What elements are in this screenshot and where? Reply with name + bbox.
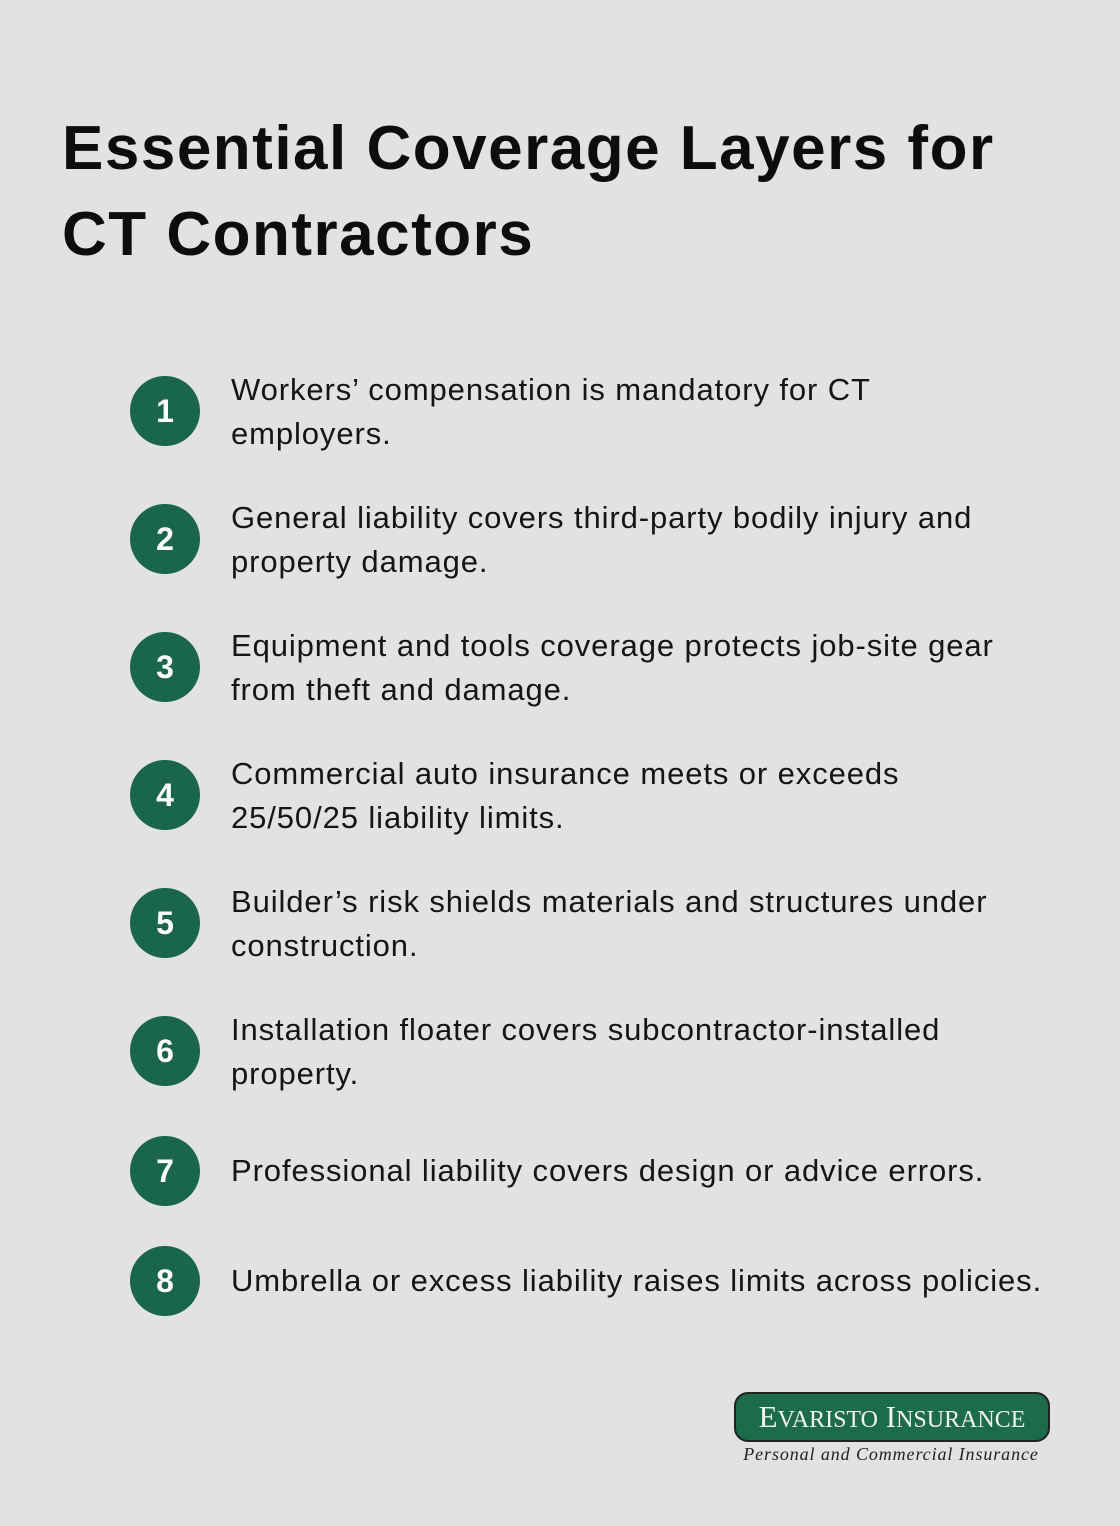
item 4: 25/50/25 liability limits.: [231, 800, 565, 835]
item 6: 6: [156, 1033, 174, 1069]
item 1: Workers’ compensation is mandatory for CT: [231, 372, 871, 407]
item 4: Commercial auto insurance meets or exceeds: [231, 756, 899, 791]
item 7: Professional liability covers design or advice errors.: [231, 1153, 984, 1188]
item 8: [130, 1246, 1042, 1316]
logo tagline: Personal and Commercial Insurance: [743, 1444, 1039, 1464]
logo badge: [734, 1392, 1050, 1442]
item 2: [130, 500, 972, 579]
item 5: Builder’s risk shields materials and structures under: [231, 884, 987, 919]
item 6: property.: [231, 1056, 359, 1091]
title: CT Contractors: [62, 200, 534, 269]
title: [62, 114, 995, 269]
item 3: from theft and damage.: [231, 672, 571, 707]
item 4: 4: [156, 777, 174, 813]
item 1: [130, 372, 871, 451]
item 8: Umbrella or excess liability raises limits across policies.: [231, 1263, 1042, 1298]
logo badge: EVARISTO INSURANCE: [759, 1399, 1025, 1434]
item 7: 7: [156, 1153, 174, 1189]
item 2: General liability covers third-party bodily injury and: [231, 500, 972, 535]
item 1: 1: [156, 393, 174, 429]
item 2: property damage.: [231, 544, 488, 579]
item 7: [130, 1136, 984, 1206]
item 2: 2: [156, 521, 174, 557]
item 3: 3: [156, 649, 174, 685]
item 3: [130, 628, 994, 707]
item 6: Installation floater covers subcontractor-installed: [231, 1012, 940, 1047]
item 1: employers.: [231, 416, 392, 451]
item 5: 5: [156, 905, 174, 941]
item 6: [130, 1012, 940, 1091]
item 4: [130, 756, 899, 835]
item 5: construction.: [231, 928, 418, 963]
item 3: Equipment and tools coverage protects job-site gear: [231, 628, 994, 663]
item 5: [130, 884, 987, 963]
item 8: 8: [156, 1263, 174, 1299]
logo: [734, 1392, 1050, 1464]
title: Essential Coverage Layers for: [62, 114, 995, 183]
